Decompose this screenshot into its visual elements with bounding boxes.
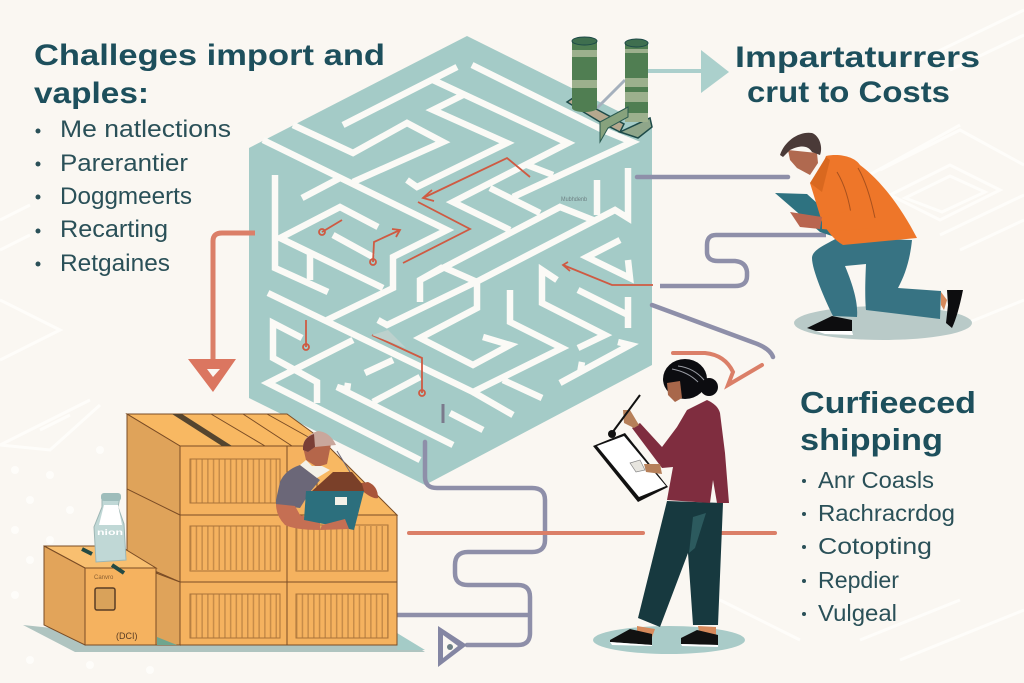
list: top left: Retgaines <box>60 250 170 277</box>
list: top left: Me natlections <box>60 116 231 143</box>
heading: top right <box>735 41 980 109</box>
small maze label: Mubhdenb <box>561 197 588 203</box>
list: lower right: Vulgeal <box>818 600 897 626</box>
list: top left: Parerantier <box>60 150 188 177</box>
list: lower right <box>802 467 955 626</box>
arrow: top right <box>648 50 729 93</box>
arrow: bottom triangle outline <box>438 626 467 667</box>
heading: lower right: shipping <box>800 422 943 457</box>
list: top left <box>36 116 231 277</box>
illustration: worker with laptop <box>276 431 378 530</box>
list: lower right: Repdier <box>818 567 899 593</box>
connector lines: grey <box>397 177 826 645</box>
box code: (DCI) <box>116 631 138 641</box>
list: top left: Recarting <box>60 216 168 243</box>
heading: lower right <box>800 385 976 457</box>
heading: top left: vaples: <box>34 77 149 110</box>
box label: Canvro <box>94 575 114 581</box>
illustration: kneeling man with tablet <box>775 133 972 340</box>
icon: glass bottle <box>94 493 126 562</box>
list: lower right: Cotopting <box>818 533 932 559</box>
list: lower right: Anr Coasls <box>818 467 934 493</box>
illustration: woman with clipboard <box>593 359 745 654</box>
heading: top left: Challeges import and <box>34 39 385 72</box>
icon: green cylinders <box>567 37 652 142</box>
icon: glass bottle: nion <box>97 528 123 537</box>
list: top left: Doggmeerts <box>60 183 192 210</box>
maze: isometric hexagonal block <box>249 36 653 485</box>
illustration: stacked cardboard boxes <box>23 414 425 652</box>
heading: lower right: Curfieeced <box>800 385 976 420</box>
arrow: left red <box>188 233 255 392</box>
connector lines: red <box>409 353 775 533</box>
red route lines <box>303 158 653 396</box>
heading: top right: crut to Costs <box>747 76 950 109</box>
heading: top right: Impartaturrers <box>735 41 980 74</box>
heading: top left <box>34 39 385 110</box>
list: lower right: Rachracrdog <box>818 500 955 526</box>
